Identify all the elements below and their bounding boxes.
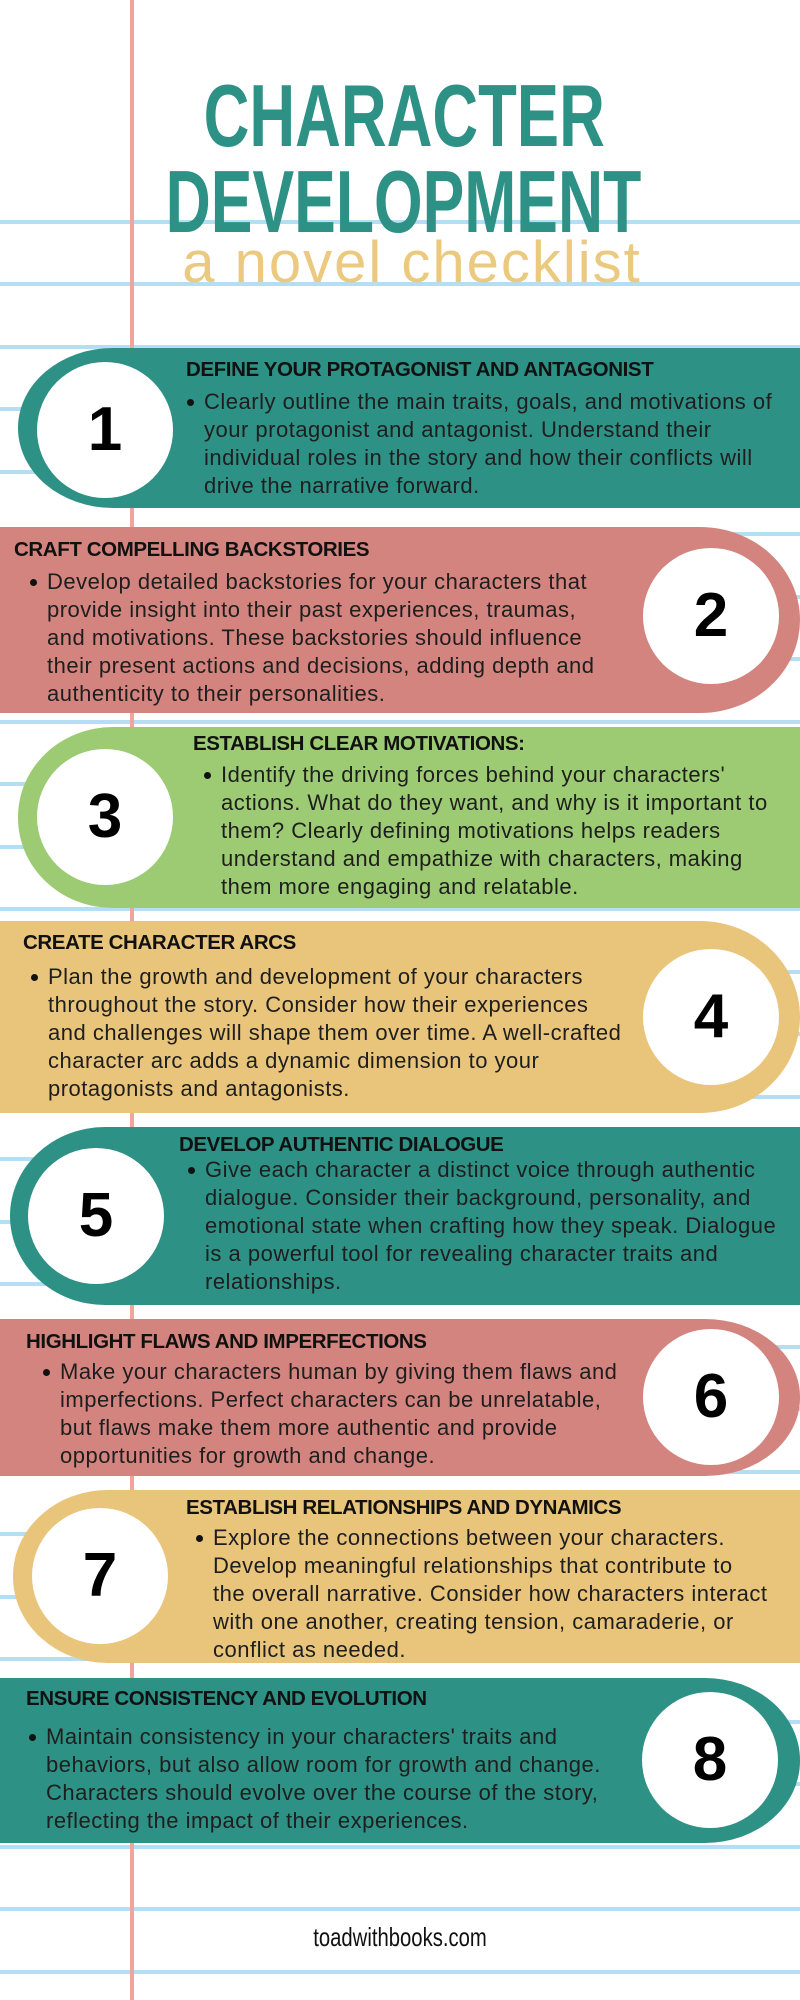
text 8 xyxy=(46,1723,601,1835)
circle 6 xyxy=(643,1329,779,1465)
circle 5 xyxy=(28,1148,164,1284)
panel 6 xyxy=(0,1319,800,1476)
circle 7: 7 xyxy=(83,1541,117,1610)
panel 4 xyxy=(0,921,800,1113)
text 3: understand and empathize with characters, making xyxy=(221,846,743,871)
text 4: Plan the growth and development of your characters xyxy=(48,964,583,989)
subtitle: a novel checklist xyxy=(182,230,642,295)
text 1: your protagonist and antagonist. Understand their xyxy=(204,417,712,442)
heading 2: CRAFT COMPELLING BACKSTORIES xyxy=(14,538,369,561)
text 3: them? Clearly defining motivations helps readers xyxy=(221,818,721,843)
heading 1: DEFINE YOUR PROTAGONIST AND ANTAGONIST xyxy=(186,358,653,381)
title: DEVELOPMENT xyxy=(166,152,641,251)
circle 7 xyxy=(32,1508,168,1644)
text 5: is a powerful tool for revealing character traits and xyxy=(205,1241,718,1266)
text 8: reflecting the impact of their experiences. xyxy=(46,1808,469,1833)
circle 2: 2 xyxy=(694,581,728,650)
text 4: throughout the story. Consider how their experiences xyxy=(48,992,588,1017)
text 5 xyxy=(205,1156,776,1296)
text 7: Develop meaningful relationships that contribute to xyxy=(213,1553,733,1578)
circle 4 xyxy=(643,949,779,1085)
text 6: Make your characters human by giving them flaws and xyxy=(60,1359,617,1384)
text 4: character arc adds a dynamic dimension to your xyxy=(48,1048,539,1073)
text 6: opportunities for growth and change. xyxy=(60,1443,435,1468)
text 7: conflict as needed. xyxy=(213,1637,406,1662)
text 7: the overall narrative. Consider how characters interact xyxy=(213,1581,768,1606)
panel 1 xyxy=(18,348,800,508)
heading 6: HIGHLIGHT FLAWS AND IMPERFECTIONS xyxy=(26,1330,427,1353)
text 2 xyxy=(47,568,595,708)
heading 8: ENSURE CONSISTENCY AND EVOLUTION xyxy=(26,1687,427,1710)
circle 8 xyxy=(642,1692,778,1828)
panel 3 xyxy=(18,727,800,908)
panel 7 xyxy=(13,1490,800,1663)
heading 5: DEVELOP AUTHENTIC DIALOGUE xyxy=(179,1133,503,1156)
text 1: individual roles in the story and how their conflicts will xyxy=(204,445,753,470)
footer: toadwithbooks.com xyxy=(313,1922,487,1952)
text 1: Clearly outline the main traits, goals, and motivations of xyxy=(204,389,772,414)
circle 1 xyxy=(37,362,173,498)
text 2: Develop detailed backstories for your characters that xyxy=(47,569,587,594)
text 1 xyxy=(204,388,772,500)
title: CHARACTER xyxy=(204,66,605,165)
panel 5 xyxy=(10,1127,800,1305)
text 8: Characters should evolve over the course of the story, xyxy=(46,1780,598,1805)
text 8: behaviors, but also allow room for growth and change. xyxy=(46,1752,601,1777)
circle 2 xyxy=(643,548,779,684)
title xyxy=(166,66,642,295)
text 5: dialogue. Consider their background, personality, and xyxy=(205,1185,751,1210)
text 6: but flaws make them more authentic and provide xyxy=(60,1415,557,1440)
text 4: protagonists and antagonists. xyxy=(48,1076,350,1101)
text 6: imperfections. Perfect characters can be unrelatable, xyxy=(60,1387,601,1412)
heading 7: ESTABLISH RELATIONSHIPS AND DYNAMICS xyxy=(186,1496,621,1519)
panel 2 xyxy=(0,527,800,713)
text 7: Explore the connections between your characters. xyxy=(213,1525,725,1550)
text 4 xyxy=(48,963,621,1103)
text 7: with one another, creating tension, camaraderie, or xyxy=(213,1609,734,1634)
circle 6: 6 xyxy=(694,1362,728,1431)
text 5: emotional state when crafting how they speak. Dialogue xyxy=(205,1213,776,1238)
text 3 xyxy=(221,761,768,901)
heading 4: CREATE CHARACTER ARCS xyxy=(23,931,296,954)
text 2: authenticity to their personalities. xyxy=(47,681,385,706)
text 4: and challenges will shape them over time. A well-crafted xyxy=(48,1020,621,1045)
circle 8: 8 xyxy=(693,1725,727,1794)
heading 3: ESTABLISH CLEAR MOTIVATIONS: xyxy=(193,732,525,755)
text 6 xyxy=(60,1358,617,1470)
text 2: and motivations. These backstories should influence xyxy=(47,625,582,650)
text 5: Give each character a distinct voice through authentic xyxy=(205,1157,755,1182)
text 5: relationships. xyxy=(205,1269,342,1294)
circle 3 xyxy=(37,749,173,885)
circle 4: 4 xyxy=(694,982,728,1051)
circle 1: 1 xyxy=(88,395,122,464)
text 3: them more engaging and relatable. xyxy=(221,874,579,899)
circle 3: 3 xyxy=(88,782,122,851)
text 7 xyxy=(213,1524,768,1664)
text 3: Identify the driving forces behind your characters' xyxy=(221,762,725,787)
text 1: drive the narrative forward. xyxy=(204,473,480,498)
text 2: their present actions and decisions, adding depth and xyxy=(47,653,595,678)
panel 8 xyxy=(0,1678,800,1843)
circle 5: 5 xyxy=(79,1181,113,1250)
text 3: actions. What do they want, and why is it important to xyxy=(221,790,768,815)
text 2: provide insight into their past experiences, traumas, xyxy=(47,597,576,622)
text 8: Maintain consistency in your characters' traits and xyxy=(46,1724,557,1749)
